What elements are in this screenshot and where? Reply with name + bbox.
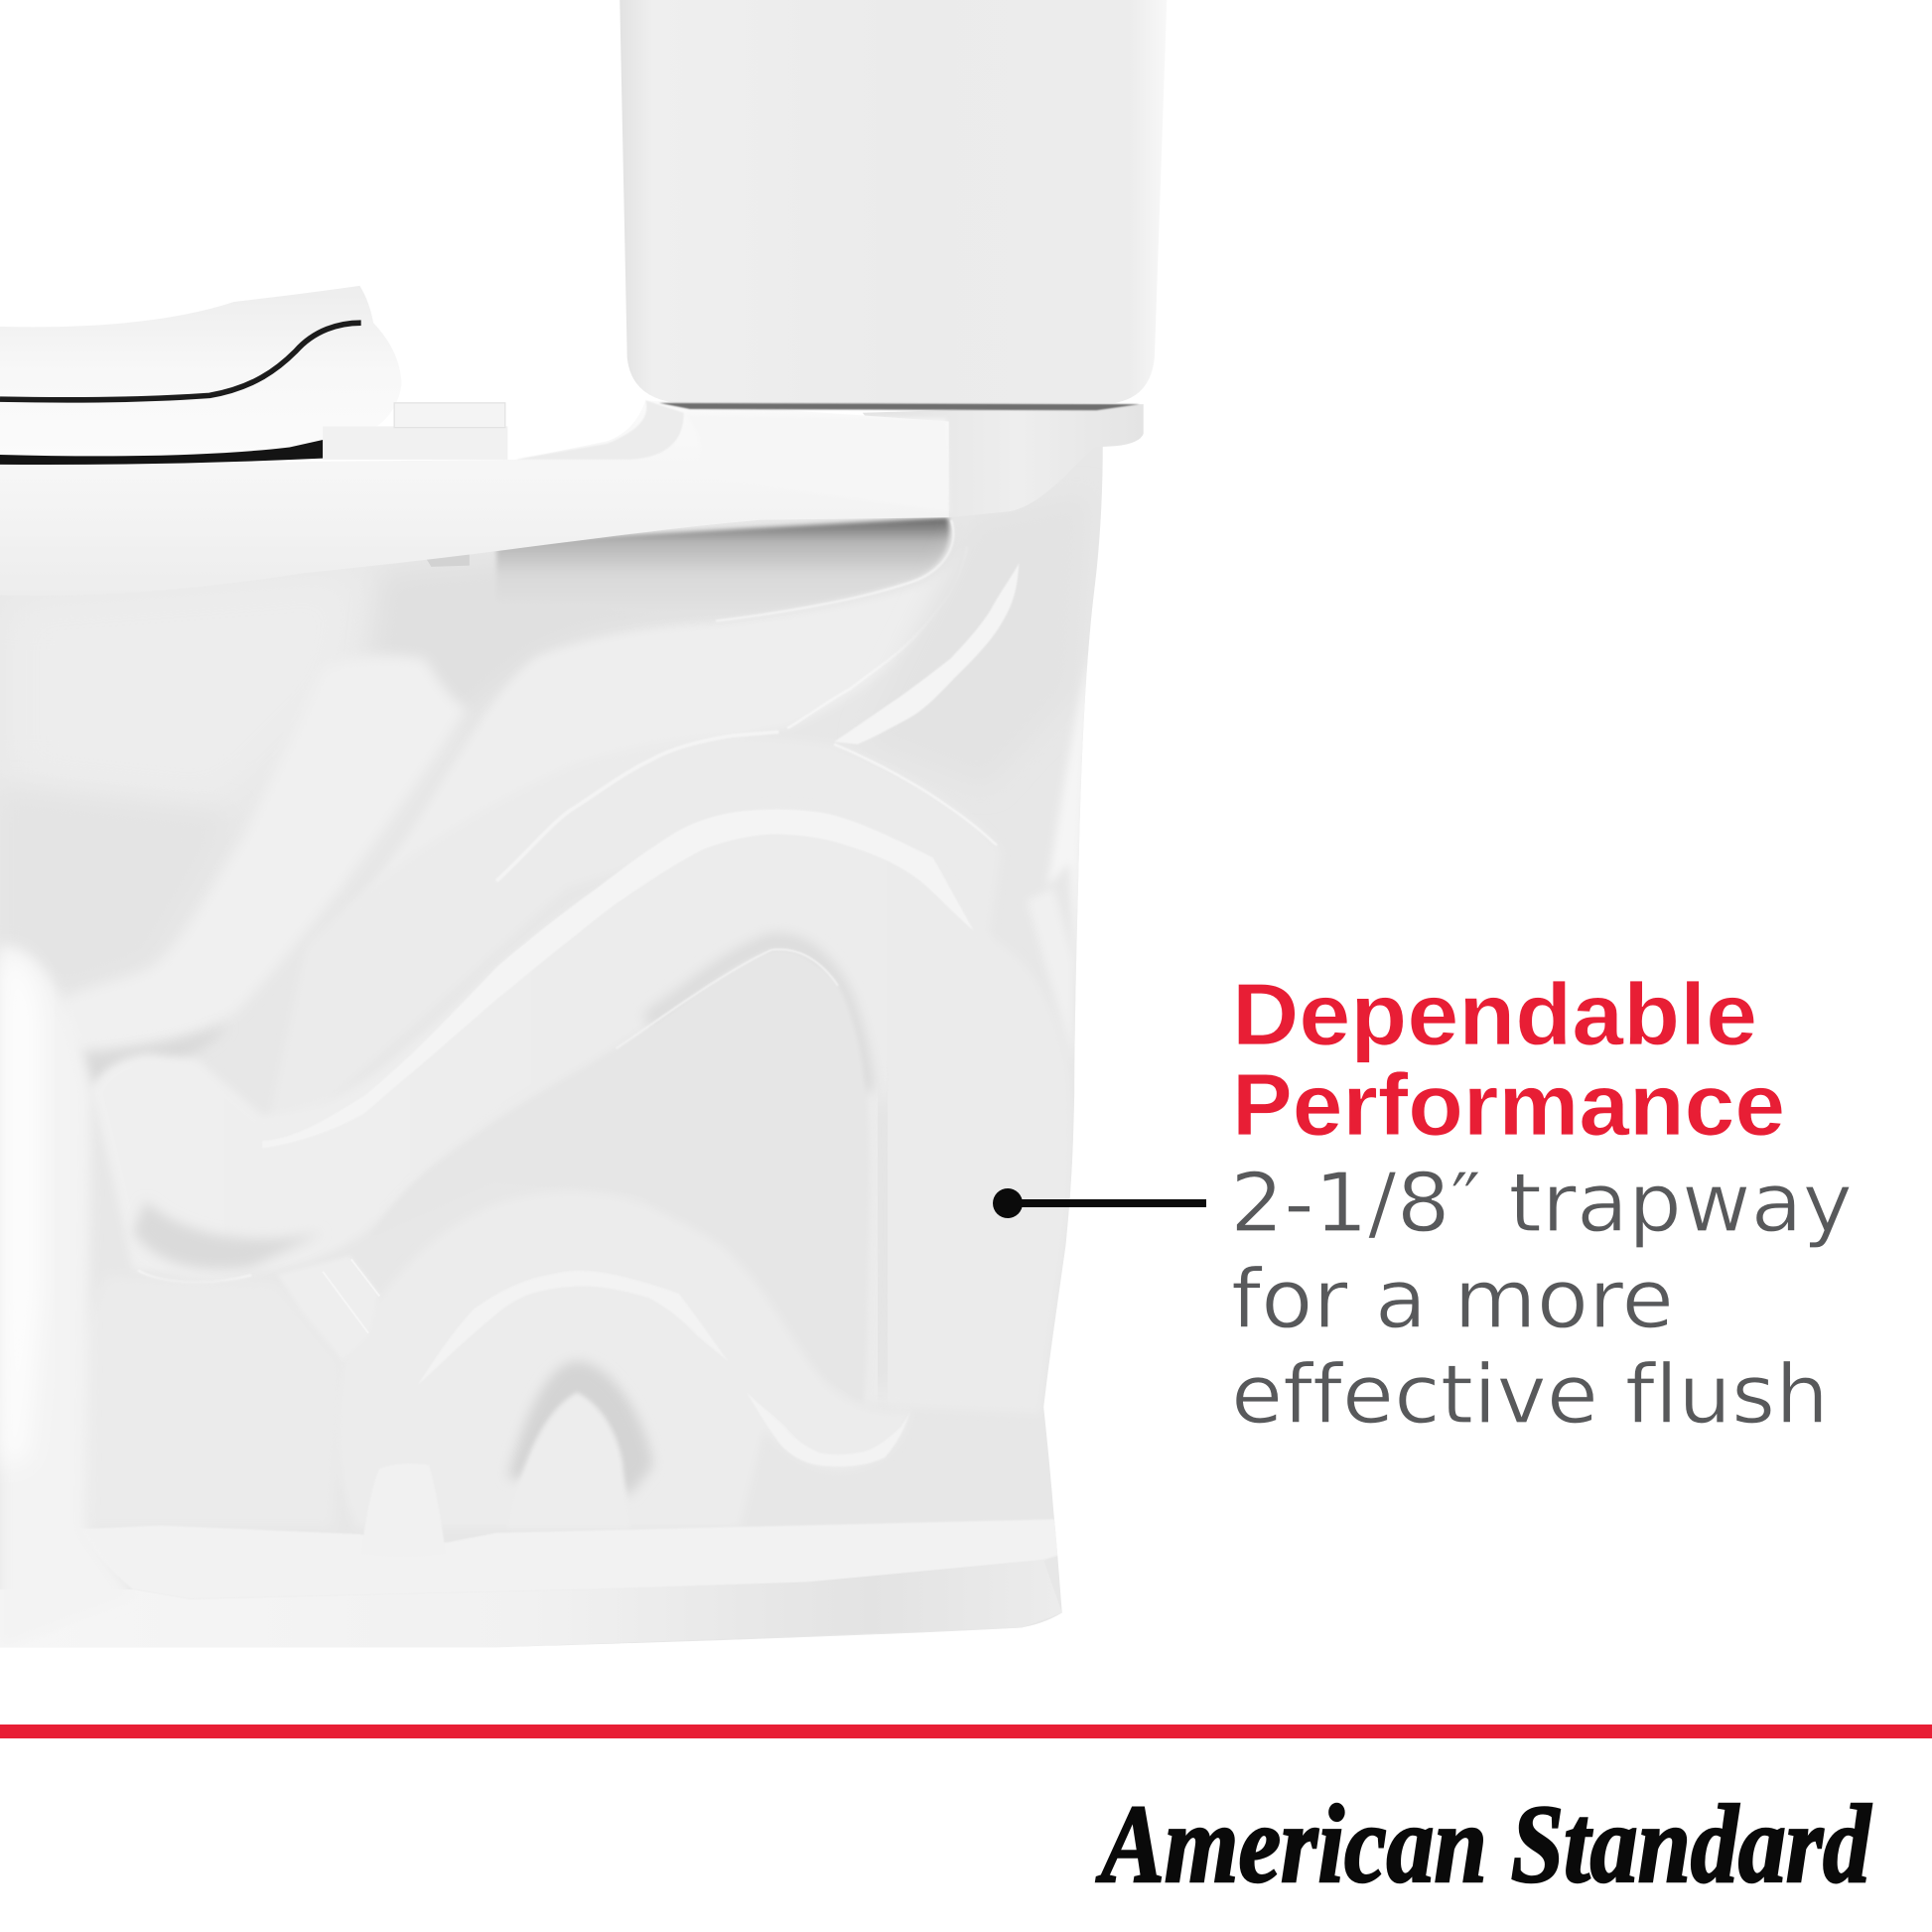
trapway inner arc shadow [653, 942, 866, 1084]
bowl front column bright [0, 955, 42, 1466]
upper jet channel [61, 655, 467, 1051]
bowl dark area [0, 788, 234, 992]
front rim bolt [427, 554, 470, 567]
toilet tank [620, 0, 1167, 403]
plinth front edge [0, 1560, 1062, 1647]
lower left area [73, 1276, 343, 1528]
valley rim line [617, 949, 838, 1048]
band thin top highlight [496, 732, 778, 881]
neck inner channel [515, 400, 684, 460]
recess inner crisp part [494, 517, 952, 584]
red divider bar [0, 1725, 1932, 1738]
toilet rim [0, 400, 949, 596]
strut [277, 1256, 379, 1361]
main trapway highlight [262, 809, 973, 1149]
mid panel [507, 614, 818, 695]
recess under rim soft [369, 522, 949, 740]
heading: Dependable Performance [1232, 965, 1785, 1154]
hump crescent [418, 1271, 728, 1385]
toilet seat lid [0, 286, 402, 459]
thin crease line [788, 715, 808, 729]
plinth top shelf [80, 1519, 1059, 1599]
tail crescent [747, 1392, 910, 1466]
toilet lower body [0, 446, 1103, 1647]
hinge base [323, 426, 507, 460]
trapway bottom edge [138, 1271, 251, 1283]
description text: 2-1/8″ trapway [1230, 1157, 1853, 1251]
fin highlight [834, 563, 1019, 745]
rim shoulder [684, 414, 949, 512]
heading: Dependable Performance: Dependable [1232, 965, 1757, 1063]
right shoulder shade [909, 547, 969, 641]
callout dot [993, 1188, 1023, 1218]
trapway underside crescent [133, 1201, 323, 1269]
callout line [1018, 1199, 1206, 1207]
bowl front column soft [0, 946, 133, 1647]
seat underside gap [0, 440, 323, 465]
band above trapway [265, 737, 1001, 1140]
heading: Dependable Performance: Performance [1232, 1055, 1785, 1154]
strut lines [323, 1259, 379, 1333]
bowl left glow [0, 567, 369, 813]
tank shadow line [659, 403, 1140, 410]
jet channel underside shadow [80, 1026, 228, 1084]
tank neck [863, 404, 1144, 517]
hump highlights [418, 1271, 910, 1466]
trapway valley [369, 951, 868, 1405]
body shading group [0, 492, 1090, 1647]
description text: for a more [1231, 1253, 1674, 1347]
hinge block [323, 403, 507, 460]
band thin lower line [834, 745, 997, 845]
hinge top [394, 403, 505, 428]
right silhouette strip [1047, 653, 1090, 986]
arch shadow under hump [507, 1361, 653, 1497]
arch opening [507, 1392, 630, 1528]
right valley crease [880, 1109, 886, 1380]
recess light edge [716, 520, 954, 621]
seat black gap [0, 323, 361, 400]
toilet illustration [0, 0, 1167, 1647]
description text [1230, 1157, 1853, 1443]
lower hump channel [336, 1191, 910, 1528]
callout leader line [993, 1188, 1206, 1218]
right crease strip [1027, 888, 1074, 1066]
main 2-1/8 inch trapway [91, 807, 1072, 1414]
description text: effective flush [1231, 1348, 1829, 1443]
bolt cap [361, 1463, 446, 1557]
